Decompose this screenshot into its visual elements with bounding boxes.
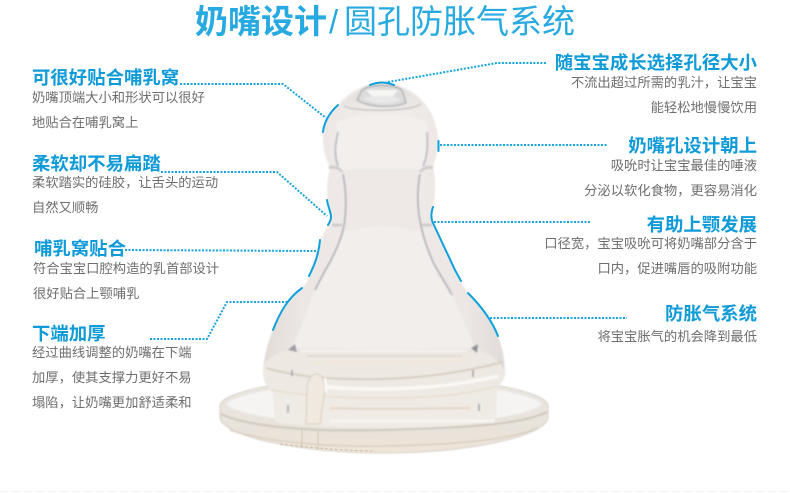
flange bbox=[220, 377, 548, 453]
corner marks bbox=[288, 344, 297, 352]
callout: 有助上颚发展: 有助上颚发展 bbox=[647, 214, 757, 235]
callout: 奶嘴孔设计朝上: 分泌以软化食物，更容易消化 bbox=[584, 182, 757, 198]
callout: 柔软却不易扁踏: 自然又顺畅 bbox=[32, 199, 98, 215]
neck shadows bbox=[315, 174, 346, 290]
flange front band over tab bbox=[302, 430, 318, 450]
title: / bbox=[329, 3, 339, 40]
callout: 防胀气系统: 将宝宝胀气的机会降到最低 bbox=[597, 329, 757, 344]
callout: 下端加厚: 经过曲线调整的奶嘴在下端 bbox=[32, 345, 192, 360]
callout: 随宝宝成长选择孔径大小: 不流出超过所需的乳汁，让宝宝 bbox=[571, 75, 757, 90]
callout: 哺乳窝贴合: 哺乳窝贴合 bbox=[34, 238, 127, 259]
title bbox=[195, 3, 575, 40]
callout: 下端加厚 bbox=[32, 323, 192, 410]
callout: 奶嘴孔设计朝上: 奶嘴孔设计朝上 bbox=[628, 135, 757, 156]
blue contour highlights bbox=[273, 82, 498, 336]
callout: 防胀气系统 bbox=[597, 303, 757, 344]
teat body bbox=[263, 83, 505, 428]
inner head panel bbox=[335, 114, 428, 170]
teat tip dome bbox=[341, 83, 423, 113]
callout: 有助上颚发展 bbox=[544, 214, 757, 276]
callout: 可很好贴合哺乳窝: 可很好贴合哺乳窝 bbox=[32, 67, 179, 88]
callout: 柔软却不易扁踏: 柔软踏实的硅胶，让舌头的运动 bbox=[32, 174, 218, 190]
callout: 下端加厚: 下端加厚 bbox=[32, 323, 106, 344]
callout: 随宝宝成长选择孔径大小 bbox=[555, 52, 758, 115]
callout: 可很好贴合哺乳窝 bbox=[32, 67, 205, 130]
callout: 随宝宝成长选择孔径大小: 随宝宝成长选择孔径大小 bbox=[555, 52, 758, 73]
callout: 奶嘴孔设计朝上 bbox=[584, 135, 757, 198]
callout: 随宝宝成长选择孔径大小: 能轻松地慢慢饮用 bbox=[651, 99, 757, 115]
callout: 柔软却不易扁踏: 柔软却不易扁踏 bbox=[32, 153, 161, 174]
callout: 下端加厚: 塌陷，让奶嘴更加舒适柔和 bbox=[32, 395, 192, 410]
moulded tab bbox=[306, 374, 324, 424]
lower rings bbox=[263, 350, 505, 428]
callout: 哺乳窝贴合 bbox=[33, 238, 219, 301]
callout: 可很好贴合哺乳窝: 奶嘴顶端大小和形状可以很好 bbox=[32, 90, 205, 105]
callout: 哺乳窝贴合: 符合宝宝口腔构造的乳首部设计 bbox=[33, 261, 219, 276]
callout: 防胀气系统: 防胀气系统 bbox=[665, 303, 757, 324]
inner neck panel bbox=[341, 170, 421, 232]
callout: 下端加厚: 加厚，使其支撑力更好不易 bbox=[32, 369, 192, 385]
head side lobes bbox=[335, 132, 338, 166]
callout: 奶嘴孔设计朝上: 吸吮时让宝宝最佳的唾液 bbox=[611, 158, 757, 173]
inner lower cone highlight bbox=[292, 227, 475, 348]
callout: 有助上颚发展: 口径宽，宝宝吸吮可将奶嘴部分含于 bbox=[544, 235, 757, 251]
callout: 哺乳窝贴合: 很好贴合上颚哺乳 bbox=[33, 286, 139, 301]
title: 奶嘴设计 bbox=[195, 3, 327, 40]
callout: 柔软却不易扁踏 bbox=[32, 153, 218, 215]
callout: 有助上颚发展: 口内，促进嘴唇的吸附功能 bbox=[597, 261, 757, 276]
title: 圆孔防胀气系统 bbox=[344, 3, 575, 40]
callout lines bbox=[125, 63, 627, 339]
nipple photograph bbox=[220, 83, 548, 453]
callout: 可很好贴合哺乳窝: 地贴合在哺乳窝上 bbox=[32, 114, 138, 130]
